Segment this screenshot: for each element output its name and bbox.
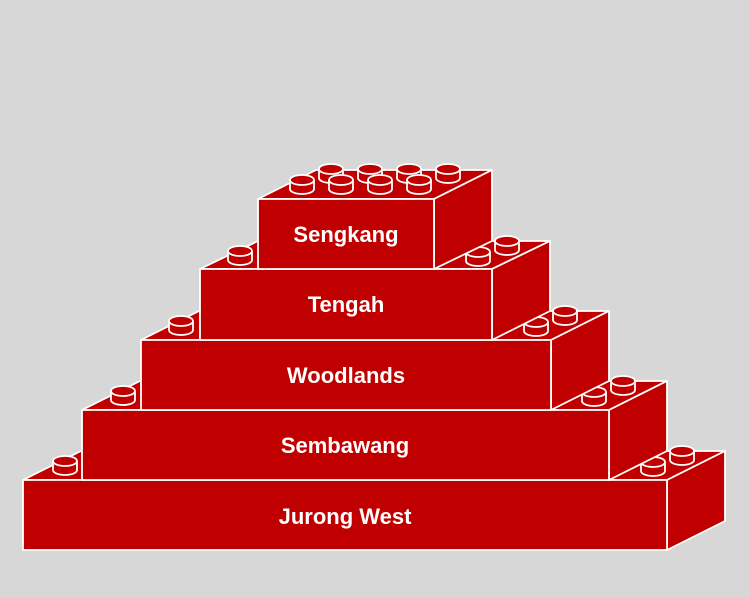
brick: Woodlands: Woodlands (287, 363, 405, 388)
brick: Sembawang (82, 376, 667, 480)
brick: Sengkang: Sengkang (293, 222, 399, 247)
brick: Tengah: Tengah (308, 292, 384, 317)
brick: Jurong West: Jurong West (279, 504, 412, 529)
brick: Tengah (200, 236, 550, 340)
brick: Woodlands (141, 306, 609, 410)
brick: Jurong West (23, 446, 725, 550)
brick: Sengkang (258, 164, 492, 269)
brick: Sembawang: Sembawang (281, 433, 409, 458)
